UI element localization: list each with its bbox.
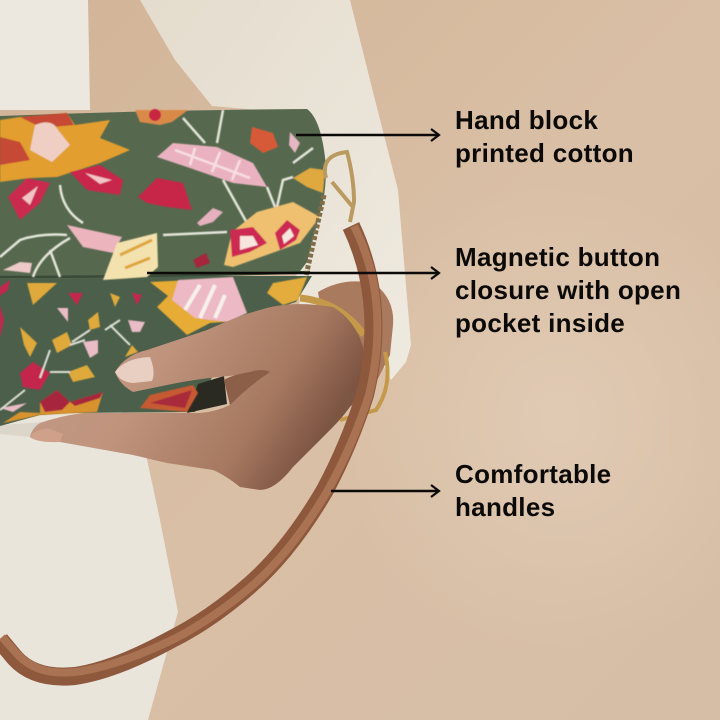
print: lower motifs bbox=[20, 283, 138, 382]
wrist bbox=[318, 281, 393, 410]
print: pink leaf bbox=[157, 143, 267, 187]
label: magnetic button closure: pocket inside bbox=[455, 308, 625, 338]
label: magnetic button closure: Magnetic button bbox=[455, 242, 660, 272]
label: hand block printed cotton: printed cotton bbox=[455, 138, 634, 168]
print: centre flower bbox=[224, 202, 320, 267]
label: magnetic button closure bbox=[455, 242, 681, 338]
arrow: printed cotton bbox=[296, 129, 439, 141]
white garment bbox=[0, 0, 411, 720]
label: comfortable handles: Comfortable bbox=[455, 459, 611, 489]
arrow: magnetic closure bbox=[147, 267, 439, 279]
bag body bbox=[0, 276, 312, 426]
bag flap bbox=[0, 109, 326, 279]
print: large orange flower bbox=[0, 113, 130, 220]
label: hand block printed cotton bbox=[455, 105, 634, 168]
label: hand block printed cotton: Hand block bbox=[455, 105, 598, 135]
chain bbox=[306, 195, 324, 276]
print: small red flowers bbox=[135, 110, 188, 125]
label: comfortable handles: handles bbox=[455, 492, 555, 522]
thumb nail bbox=[115, 357, 154, 383]
hand bbox=[30, 304, 364, 490]
leather strap bbox=[0, 226, 377, 677]
print: small leaves bbox=[67, 225, 122, 253]
finger nail bbox=[30, 429, 63, 442]
bag bbox=[0, 109, 326, 426]
label: magnetic button closure: closure with open bbox=[455, 275, 681, 305]
print: big lower flower bbox=[150, 278, 247, 335]
print: white stems bbox=[0, 110, 313, 277]
arrow: handles bbox=[331, 485, 439, 497]
label: comfortable handles bbox=[455, 459, 611, 522]
print: bottom flowers bbox=[3, 390, 103, 423]
metal clasp bbox=[325, 152, 354, 222]
bangles bbox=[300, 298, 388, 420]
